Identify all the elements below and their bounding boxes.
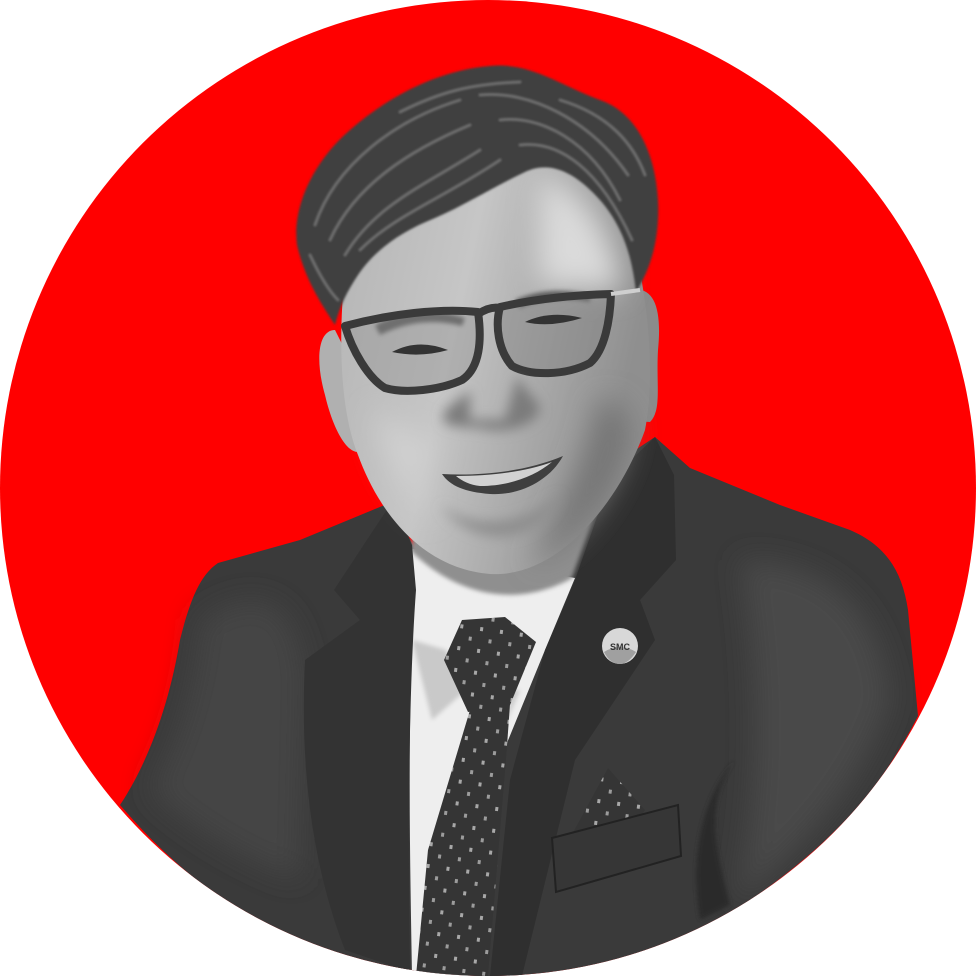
eyebrows xyxy=(375,291,590,335)
facial shading xyxy=(375,175,629,565)
suit shading xyxy=(150,560,890,920)
lapel pin xyxy=(602,628,638,664)
left lens xyxy=(345,311,480,391)
collar shadow xyxy=(412,640,520,725)
hair xyxy=(296,66,658,325)
bridge xyxy=(478,308,500,314)
glasses xyxy=(345,290,640,391)
mouth xyxy=(442,456,563,494)
face xyxy=(341,155,650,574)
right lapel xyxy=(490,437,676,976)
left lapel xyxy=(304,502,416,972)
breast pocket xyxy=(552,805,681,892)
pocket square xyxy=(586,778,640,825)
left ear xyxy=(319,330,357,452)
suit jacket xyxy=(120,437,918,976)
shirt xyxy=(408,548,575,976)
person xyxy=(120,66,918,976)
hair highlights xyxy=(310,82,645,300)
right ear xyxy=(643,290,660,422)
right lens xyxy=(498,294,611,373)
temple xyxy=(611,290,640,294)
lapel pin: SMC xyxy=(610,642,630,652)
tie blade xyxy=(416,704,510,976)
neck xyxy=(410,517,596,598)
tie knot xyxy=(444,617,536,712)
eyes xyxy=(392,315,582,355)
nose xyxy=(443,375,540,430)
